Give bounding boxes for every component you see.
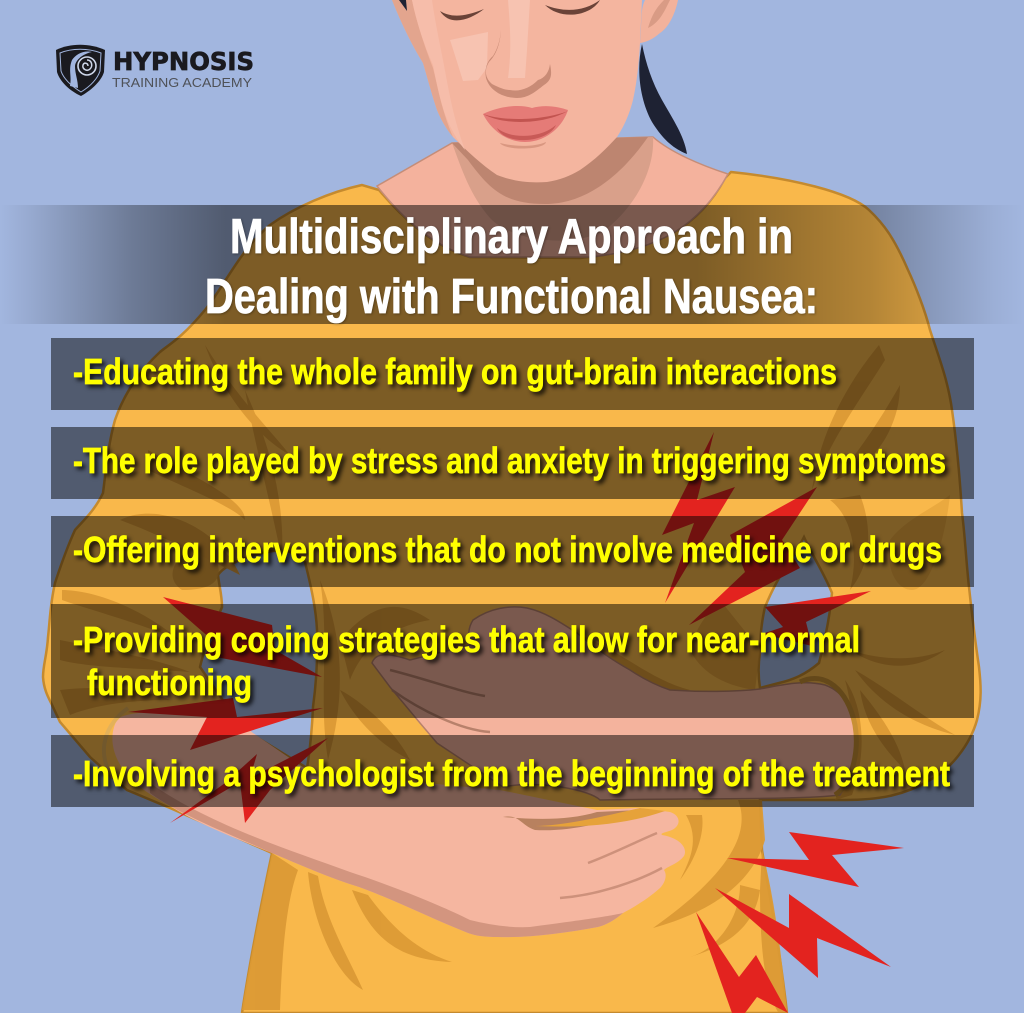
left sleeve cuff (104, 708, 128, 778)
bolt d (163, 597, 322, 677)
bolt i (696, 912, 788, 1013)
list items: -Educating the whole family on gut-brain interactions (73, 351, 837, 392)
title band (0, 205, 1024, 324)
title (205, 210, 818, 324)
title: Dealing with Functional Nausea: (205, 270, 818, 324)
ear (640, 0, 678, 43)
bolt g (727, 832, 904, 887)
title: Multidisciplinary Approach in (230, 210, 793, 264)
list items: functioning (87, 662, 252, 703)
lightning bolts (128, 432, 904, 1013)
logo name: HYPNOSIS (113, 47, 254, 76)
hair (639, 44, 687, 154)
upper hand finger lines (390, 670, 490, 732)
lower arm and hand (112, 712, 685, 937)
bolt e (128, 698, 323, 750)
logo tagline: TRAINING ACADEMY (112, 76, 253, 90)
list bars (51, 338, 974, 807)
sleeve cuff (800, 679, 856, 795)
eyes (440, 9, 484, 20)
bolt b (689, 487, 817, 625)
list items (73, 351, 950, 794)
logo shield (56, 45, 105, 96)
bolt c (762, 591, 871, 646)
neck shadow (452, 137, 653, 241)
cheek band (412, 0, 465, 150)
face (392, 0, 642, 182)
face side shading (392, 0, 453, 137)
bolt a (662, 432, 735, 603)
bolt f (170, 738, 328, 823)
neck and chest (377, 137, 728, 257)
finger lines (560, 833, 662, 898)
thumb fold (503, 810, 640, 830)
shirt (43, 172, 981, 1013)
nose (485, 30, 551, 98)
cheek highlight (450, 32, 488, 81)
lower arm edge (150, 783, 623, 937)
lips (483, 106, 568, 149)
logo (56, 45, 254, 96)
shirt folds (60, 345, 955, 1012)
list items: -Providing coping strategies that allow for near-normal (73, 619, 860, 660)
hair strand (399, 0, 407, 11)
bolt h (715, 888, 891, 978)
upper forearm and hand (372, 607, 856, 800)
nose highlight (508, 0, 530, 78)
